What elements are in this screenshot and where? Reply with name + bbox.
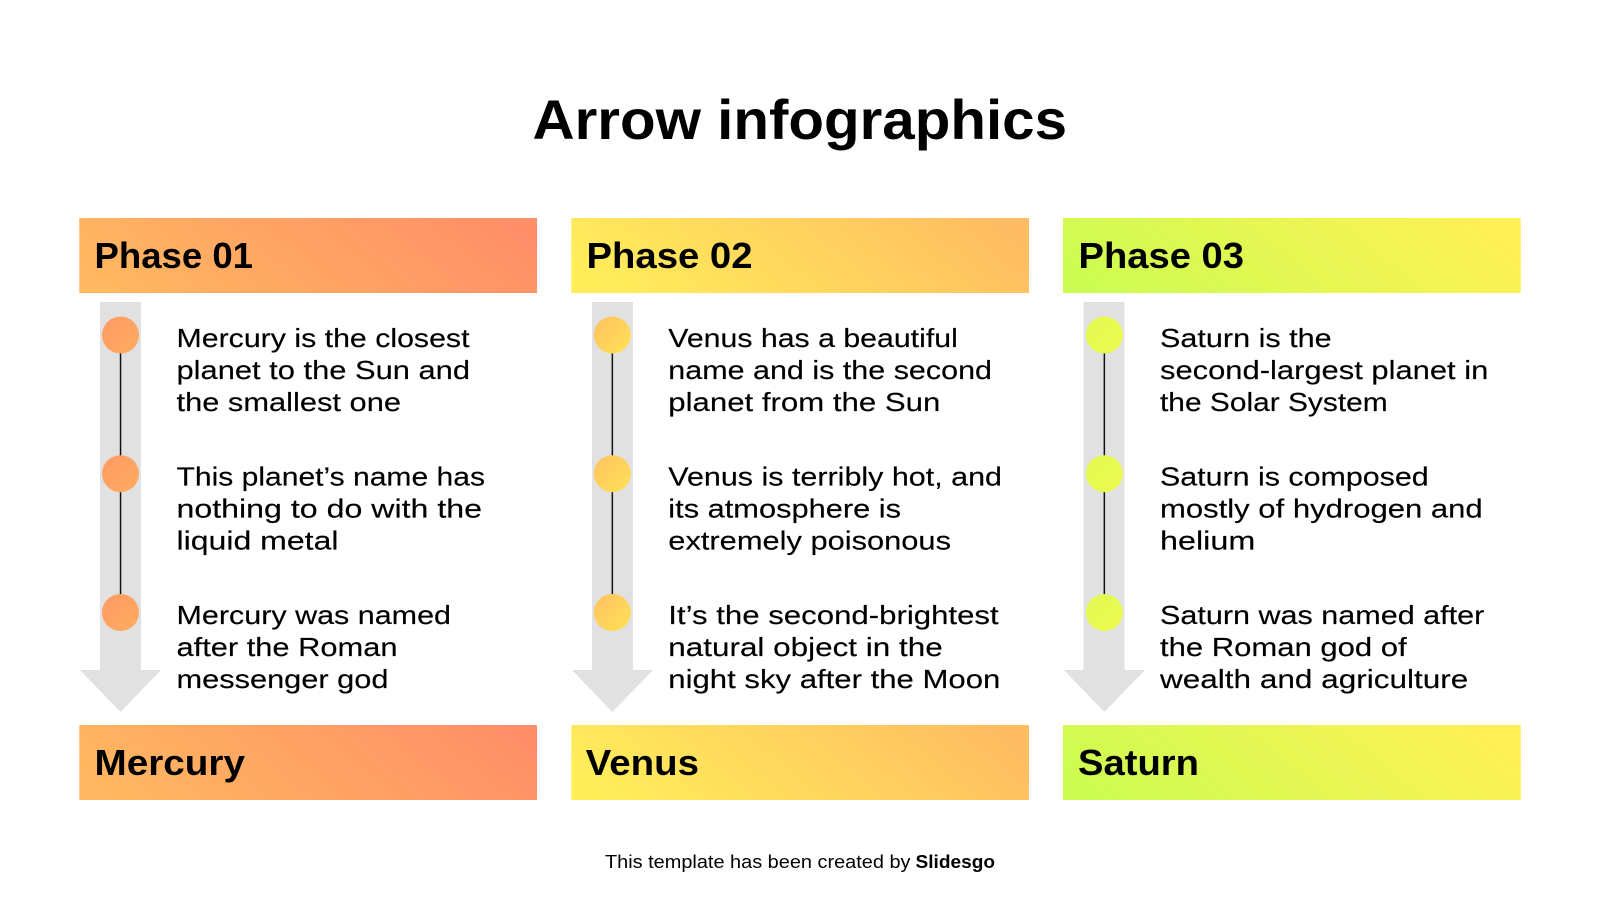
text block: Saturn fact 3 xyxy=(1159,600,1485,694)
text block: Venus fact 3: natural object in the xyxy=(668,632,943,662)
text block: Venus fact 2: its atmosphere is xyxy=(668,494,901,524)
text block: Saturn fact 1: the Solar System xyxy=(1160,387,1388,417)
text block: Mercury fact 1: planet to the Sun and xyxy=(176,355,470,385)
timeline line and dots 3 xyxy=(1086,316,1123,631)
text block: Venus fact 2: Venus is terribly hot, and xyxy=(668,462,1002,492)
header: Phase 02: Phase 02 xyxy=(586,235,752,276)
text block: Mercury fact 1 xyxy=(176,323,470,417)
footer bar: Saturn xyxy=(1063,725,1521,800)
text block: Saturn fact 3: the Roman god of xyxy=(1160,632,1408,662)
footer bar: Venus xyxy=(571,725,1029,800)
text block: Venus fact 3 xyxy=(668,600,1000,694)
text block: Saturn fact 3: Saturn was named after xyxy=(1160,600,1485,630)
title: Arrow infographics xyxy=(532,88,1067,151)
text block: Mercury fact 3: messenger god xyxy=(176,664,388,694)
text block: Saturn fact 2 xyxy=(1160,462,1483,556)
text block: Mercury fact 2 xyxy=(176,462,485,556)
text block: Saturn fact 2: Saturn is composed xyxy=(1160,462,1429,492)
footer bar: Venus: Venus xyxy=(586,742,699,783)
panel: Phase 02 Venus xyxy=(571,218,1029,800)
header: Phase 01: Phase 01 xyxy=(94,235,253,276)
text block: Mercury fact 1: the smallest one xyxy=(176,387,401,417)
header: Phase 02 xyxy=(571,218,1029,293)
text block: Venus fact 1: planet from the Sun xyxy=(668,387,940,417)
text block: Saturn fact 3: wealth and agriculture xyxy=(1159,664,1468,694)
timeline line and dots 1 xyxy=(102,316,139,631)
footer bar: Mercury xyxy=(79,725,537,800)
text block: Venus fact 1: name and is the second xyxy=(668,355,992,385)
text block: Mercury fact 3: Mercury was named xyxy=(176,600,451,630)
text block: Venus fact 1: Venus has a beautiful xyxy=(668,323,958,353)
text block: Mercury fact 2: This planet’s name has xyxy=(176,462,485,492)
timeline line and dots 2 xyxy=(594,316,631,631)
credit line: Slidesgo xyxy=(916,852,995,872)
text block: Venus fact 3: night sky after the Moon xyxy=(668,664,1000,694)
panel: Phase 03 Saturn xyxy=(1063,218,1521,800)
text block: Mercury fact 2: nothing to do with the xyxy=(176,494,482,524)
text block: Mercury fact 3 xyxy=(176,600,451,694)
text block: Venus fact 3: It’s the second-brightest xyxy=(668,600,1000,630)
text block: Mercury fact 3: after the Roman xyxy=(176,632,398,662)
header: Phase 01 xyxy=(79,218,537,293)
footer bar: Saturn: Saturn xyxy=(1078,742,1199,783)
text block: Saturn fact 2: mostly of hydrogen and xyxy=(1160,494,1483,524)
text block: Mercury fact 1: Mercury is the closest xyxy=(176,323,470,353)
text block: Saturn fact 1: second-largest planet in xyxy=(1160,355,1488,385)
text block: Saturn fact 1 xyxy=(1160,323,1488,417)
arrow: timeline 2 xyxy=(572,302,653,712)
header: Phase 03 xyxy=(1063,218,1521,293)
text block: Mercury fact 2: liquid metal xyxy=(176,526,338,556)
text block: Venus fact 1 xyxy=(668,323,992,417)
text block: Venus fact 2 xyxy=(668,462,1002,556)
panel: Phase 01 Mercury xyxy=(79,218,537,800)
text block: Venus fact 2: extremely poisonous xyxy=(668,526,951,556)
header: Phase 03: Phase 03 xyxy=(1078,235,1244,276)
text block: Saturn fact 1: Saturn is the xyxy=(1160,323,1332,353)
arrow: timeline 3 xyxy=(1064,302,1145,712)
credit line: This template has been created by xyxy=(605,852,910,872)
footer bar: Mercury: Mercury xyxy=(94,742,245,783)
arrow: timeline 1 xyxy=(80,302,161,712)
text block: Saturn fact 2: helium xyxy=(1160,526,1255,556)
